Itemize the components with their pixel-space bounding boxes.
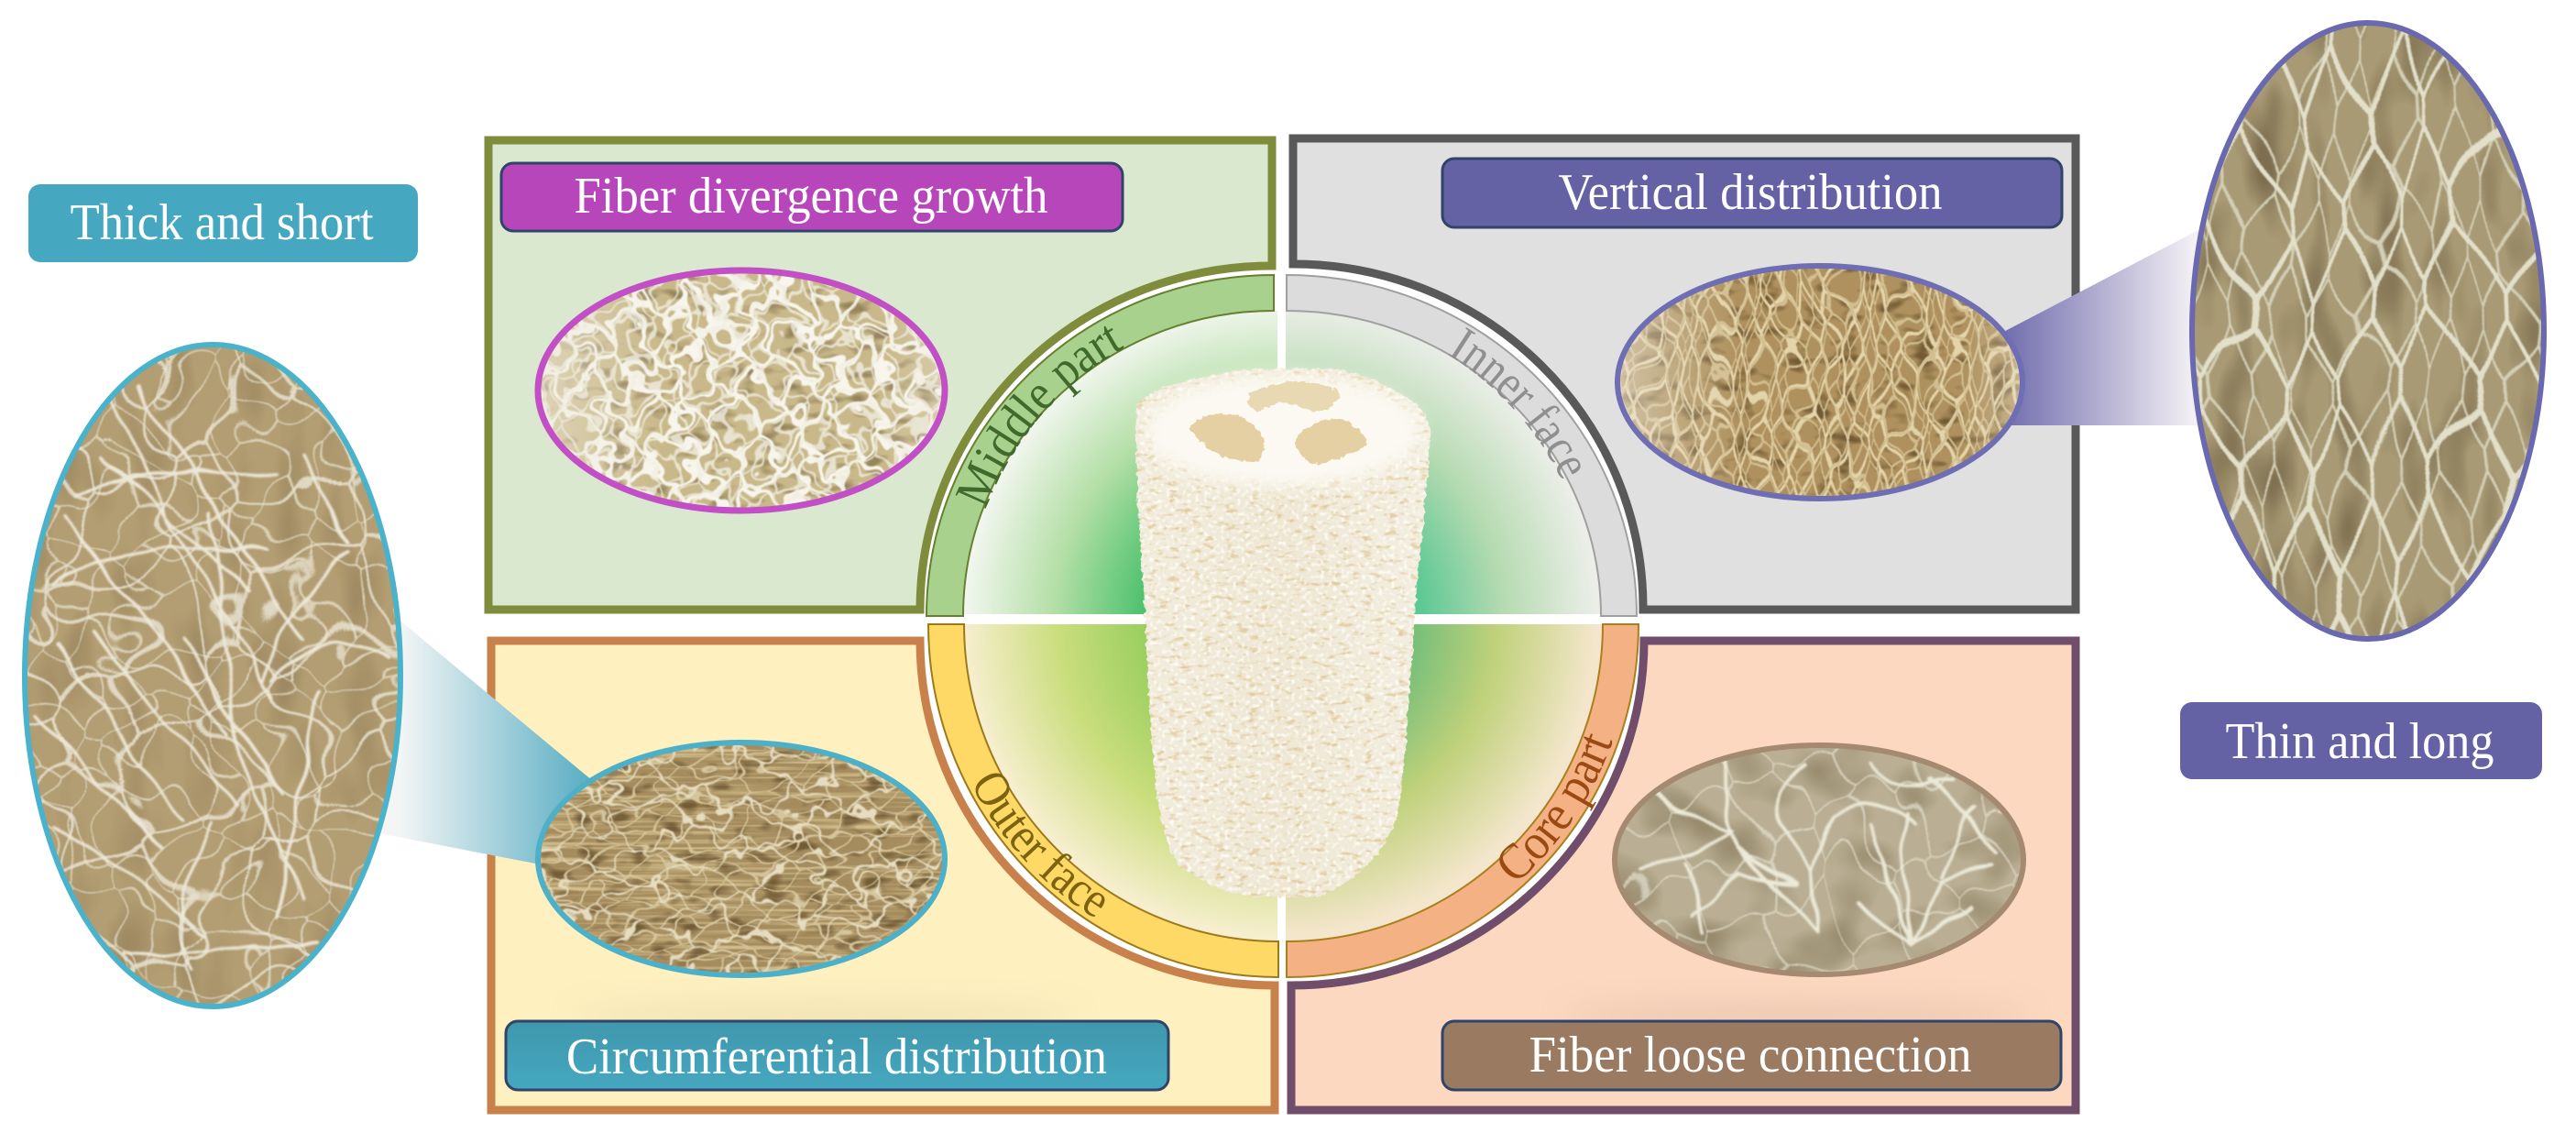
- heading: fiber divergence growth: [501, 163, 1123, 231]
- arc label: outer face: Outer face: [975, 774, 1105, 917]
- quadrant: core part: [1286, 623, 1639, 978]
- hole: top: [1248, 382, 1340, 412]
- panel: inner face, top right: [1293, 138, 2076, 610]
- magnified ellipse: thin and long fibers: [2189, 20, 2547, 642]
- arc label: inner face: Inner face: [1448, 327, 1581, 478]
- connector: outer face zoom: [348, 578, 641, 884]
- callout: thin and long: [2180, 702, 2542, 779]
- quadrant: inner face: [1286, 274, 1638, 617]
- texture ellipse: circumferential distribution: [535, 740, 948, 978]
- callout: thin and long: Thin and long: [2225, 713, 2494, 770]
- heading: circumferential distribution: Circumferential distribution: [566, 1028, 1107, 1085]
- heading: fiber loose connection: [1442, 1021, 2061, 1090]
- quadrant: middle part: [926, 274, 1277, 617]
- arc label: middle part: Middle part: [955, 326, 1124, 509]
- panel: core part, bottom right: [1291, 641, 2080, 1110]
- hole: left: [1189, 413, 1264, 461]
- magnified ellipse: thick and short fibers: [22, 342, 403, 1009]
- panel: outer face, bottom left: [491, 641, 1275, 1110]
- diagram: central ring: [926, 274, 1639, 978]
- callout: thick and short: [28, 184, 418, 262]
- heading: vertical distribution: Vertical distribution: [1558, 164, 1943, 221]
- image: loofah cylinder: [1136, 368, 1431, 896]
- texture ellipse: vertical distribution: [1615, 263, 2025, 501]
- connector: inner face zoom: [1970, 220, 2218, 425]
- callout: thick and short: Thick and short: [70, 194, 374, 251]
- heading: fiber divergence growth: Fiber divergence growth: [574, 168, 1048, 225]
- panel: middle part, top left: [488, 140, 1272, 610]
- texture ellipse: fiber loose connection: [1612, 742, 2026, 977]
- heading: vertical distribution: [1442, 159, 2062, 227]
- heading: fiber loose connection: Fiber loose connection: [1529, 1027, 1972, 1084]
- hole: right: [1296, 420, 1365, 464]
- texture ellipse: fiber divergence: [535, 268, 948, 513]
- quadrant: outer face: [927, 623, 1279, 978]
- arc label: core part: Core part: [1499, 733, 1613, 878]
